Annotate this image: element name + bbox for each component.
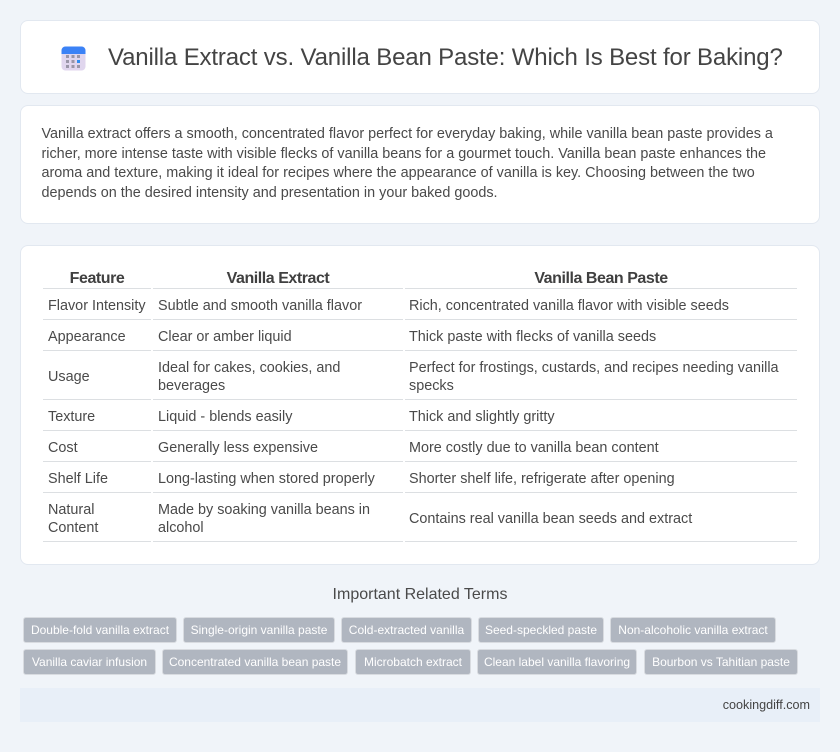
row: texture: Liquid - blends easily bbox=[158, 409, 292, 425]
row: natural content: Content bbox=[48, 520, 98, 536]
row: flavor intensity: Flavor Intensity bbox=[48, 298, 146, 314]
tag list: Seed-speckled paste bbox=[485, 623, 597, 637]
row: natural content: Natural bbox=[48, 502, 94, 518]
row: texture bbox=[48, 409, 555, 425]
row: usage: Perfect for frostings, custards, and recipes needing vanilla bbox=[409, 360, 779, 376]
row: appearance: Appearance bbox=[48, 329, 126, 345]
tag list bbox=[23, 617, 798, 675]
row: shelf life: Shelf Life bbox=[48, 471, 108, 487]
row: shelf life bbox=[48, 471, 675, 487]
tag list: Vanilla caviar infusion bbox=[32, 655, 147, 669]
tag list: Clean label vanilla flavoring bbox=[484, 655, 630, 669]
tag list: Microbatch extract bbox=[364, 655, 462, 669]
row: cost bbox=[48, 440, 659, 456]
tag list: Bourbon vs Tahitian paste bbox=[652, 655, 790, 669]
text block: intro paragraph: aroma and texture, making it ideal for recipes where the appearance of vanilla is key. Choosing between the two bbox=[42, 165, 755, 181]
row: shelf life: Long-lasting when stored properly bbox=[158, 471, 375, 487]
footer source: cookingdiff.com bbox=[723, 698, 810, 712]
row: cost: More costly due to vanilla bean content bbox=[409, 440, 659, 456]
row: usage: Usage bbox=[48, 369, 90, 385]
row: flavor intensity bbox=[48, 298, 729, 314]
text block: intro paragraph: depends on the desired intensity and presentation in your baked goods. bbox=[42, 184, 498, 200]
row: flavor intensity: Rich, concentrated vanilla flavor with visible seeds bbox=[409, 298, 729, 314]
heading: important related terms: Important Related Terms bbox=[333, 586, 507, 602]
row: usage: beverages bbox=[158, 378, 225, 394]
text block: intro paragraph: richer, more intense taste with visible flecks of vanilla beans for a gourmet touch. Vanilla bean paste enhances the bbox=[42, 146, 766, 162]
row: appearance bbox=[48, 329, 656, 345]
row: natural content: alcohol bbox=[158, 520, 204, 536]
panel: comparison table bbox=[20, 245, 820, 565]
text block: intro paragraph bbox=[42, 126, 773, 200]
row: cost: Cost bbox=[48, 440, 78, 456]
table header: Feature bbox=[70, 270, 124, 287]
row: usage bbox=[48, 360, 779, 394]
tag list: Double-fold vanilla extract bbox=[31, 623, 169, 637]
row: natural content: Made by soaking vanilla beans in bbox=[158, 502, 370, 518]
table header bbox=[70, 270, 668, 287]
table header: Vanilla Bean Paste bbox=[534, 270, 668, 287]
icon: calendar bbox=[62, 46, 86, 70]
row: cost: Generally less expensive bbox=[158, 440, 318, 456]
row: usage: specks bbox=[409, 378, 454, 394]
title: Vanilla Extract vs. Vanilla Bean Paste: Which Is Best for Baking? bbox=[108, 44, 783, 71]
text block: intro paragraph: Vanilla extract offers a smooth, concentrated flavor perfect for everyday baking, while vanilla bean paste provides a bbox=[42, 126, 773, 142]
row: natural content: Contains real vanilla bean seeds and extract bbox=[409, 511, 692, 527]
row: usage: Ideal for cakes, cookies, and bbox=[158, 360, 340, 376]
row: texture: Texture bbox=[48, 409, 95, 425]
row: natural content bbox=[48, 502, 692, 536]
footer bar bbox=[20, 688, 820, 722]
panel: intro text bbox=[20, 105, 820, 224]
row: appearance: Thick paste with flecks of vanilla seeds bbox=[409, 329, 656, 345]
tag list: Concentrated vanilla bean paste bbox=[169, 655, 341, 669]
tag list: Non-alcoholic vanilla extract bbox=[618, 623, 768, 637]
comparison table bbox=[43, 270, 797, 542]
tag list: Cold-extracted vanilla bbox=[349, 623, 464, 637]
tag list: Single-origin vanilla paste bbox=[191, 623, 327, 637]
panel: title card bbox=[20, 20, 820, 94]
row: flavor intensity: Subtle and smooth vanilla flavor bbox=[158, 298, 362, 314]
row: texture: Thick and slightly gritty bbox=[409, 409, 555, 425]
row: appearance: Clear or amber liquid bbox=[158, 329, 292, 345]
row: shelf life: Shorter shelf life, refrigerate after opening bbox=[409, 471, 675, 487]
table header: Vanilla Extract bbox=[227, 270, 329, 287]
